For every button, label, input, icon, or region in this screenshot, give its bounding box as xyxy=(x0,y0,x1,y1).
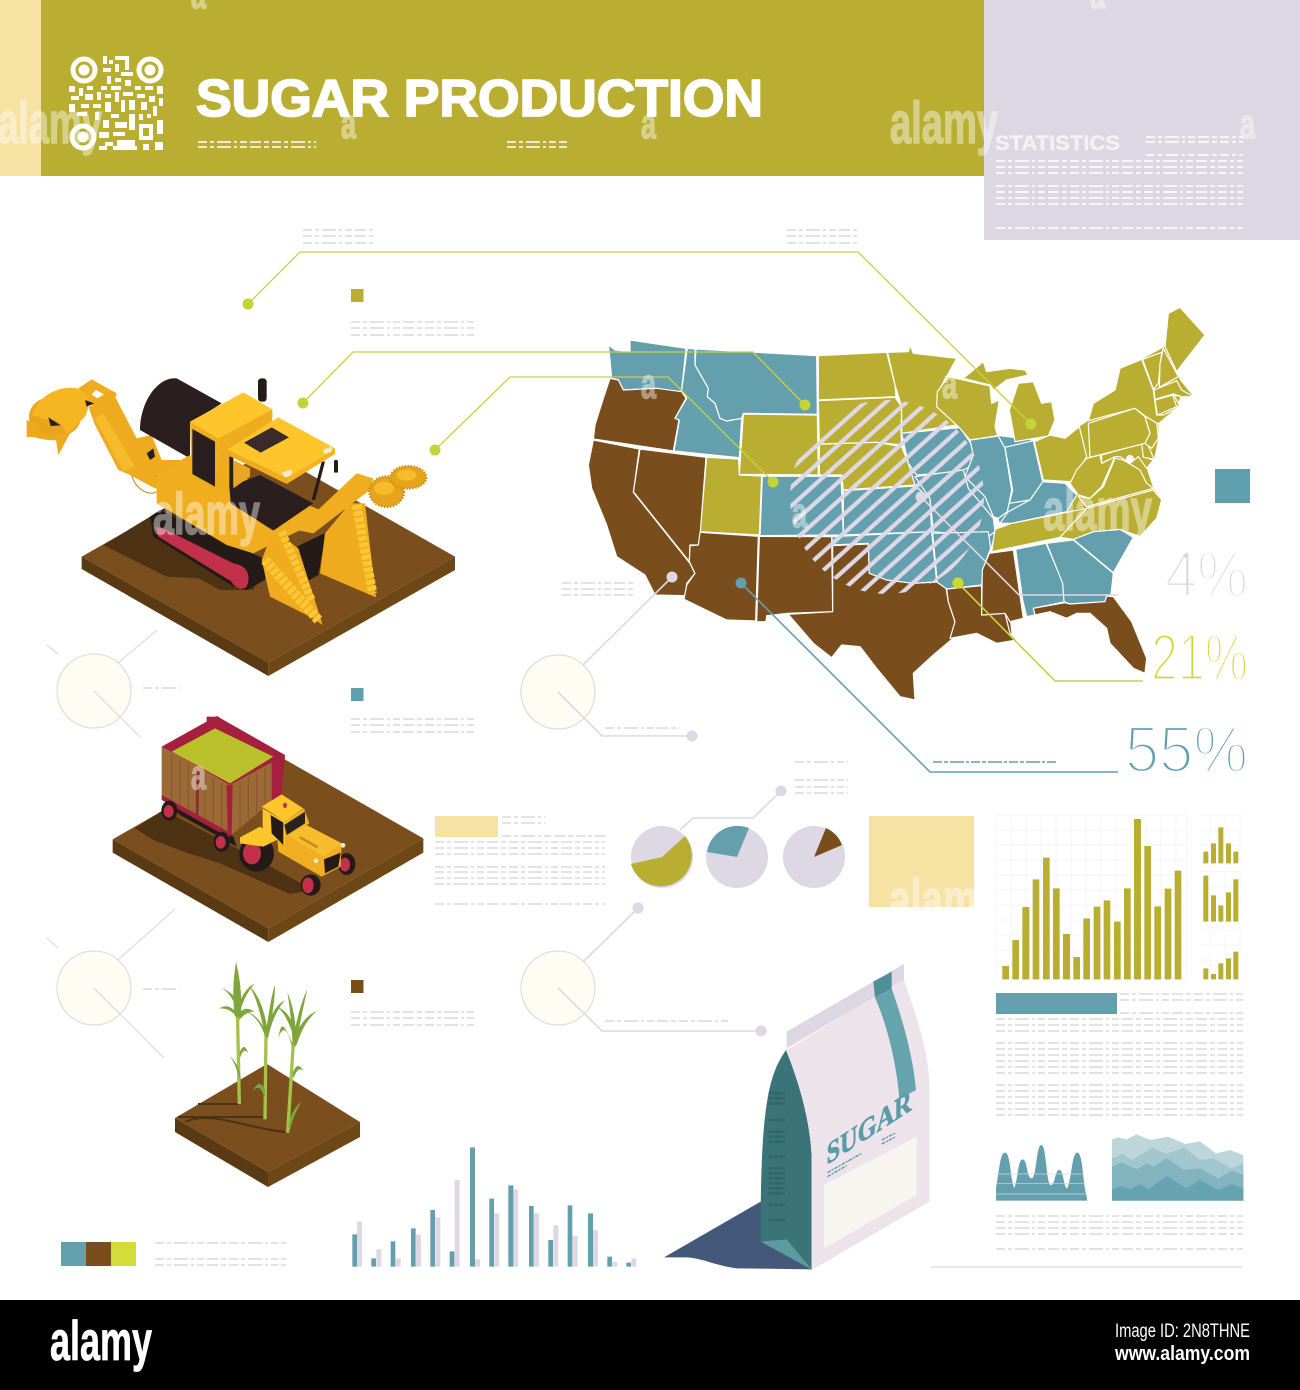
sugar bag xyxy=(664,964,929,1270)
watermarks: a xyxy=(641,100,656,147)
crop dividers xyxy=(262,503,376,625)
connector: 21% xyxy=(952,578,1143,681)
sugar cane circle callout xyxy=(47,909,180,1058)
pie: brown xyxy=(783,826,845,888)
connector: 55% xyxy=(736,578,1118,772)
black tank xyxy=(140,378,222,458)
map backing fills xyxy=(947,307,1205,642)
machine body xyxy=(157,455,322,553)
front arm with discs xyxy=(297,466,426,533)
pie charts xyxy=(631,762,848,888)
icon: map dot near California with circle callout xyxy=(521,572,698,742)
right column text block xyxy=(996,993,1243,1115)
western and central states xyxy=(588,340,1017,700)
percent: 4: 4% xyxy=(1165,537,1248,611)
map of the United States xyxy=(588,307,1205,700)
small olive bar charts xyxy=(1200,815,1242,982)
bag circle callout xyxy=(521,902,766,1036)
black throat xyxy=(297,533,326,582)
panel: statistics xyxy=(984,0,1300,240)
small bars: top xyxy=(1203,827,1238,863)
footer logo: alamy xyxy=(50,1309,152,1372)
hatched sugar beet region xyxy=(790,400,984,594)
statistics text lines xyxy=(996,137,1243,228)
bag side gusset xyxy=(761,1050,812,1270)
soil plot xyxy=(113,750,423,942)
title caption lines xyxy=(198,142,567,147)
watermarks: a xyxy=(641,360,656,407)
harvester on soil plot xyxy=(27,378,455,676)
exhaust xyxy=(258,378,267,402)
watermarks: a xyxy=(1240,100,1255,147)
eastern states xyxy=(937,307,1205,673)
track xyxy=(150,510,267,590)
marker: teal square with text xyxy=(351,688,475,732)
marker: large teal legend square xyxy=(1215,469,1250,503)
marker: olive square with text xyxy=(351,289,475,335)
watermarks: alamy xyxy=(0,91,102,156)
teal and lavender bar chart xyxy=(352,1147,636,1267)
percent callouts xyxy=(736,492,1248,786)
watermarks: alamy xyxy=(153,482,260,547)
small bars: middle xyxy=(1203,876,1238,922)
pie connector xyxy=(680,762,848,830)
watermarks: alamy xyxy=(890,91,998,156)
bag window xyxy=(824,1137,917,1248)
text block beside tractor xyxy=(435,816,605,904)
bag top seal xyxy=(787,964,904,1048)
pie: olive xyxy=(631,826,693,888)
watermarks: a xyxy=(191,751,206,798)
top labels xyxy=(303,230,857,243)
pie: teal xyxy=(706,826,768,888)
engine box xyxy=(190,392,272,490)
watermarks: a xyxy=(341,100,356,147)
claw head xyxy=(27,379,117,455)
watermarks: alamy xyxy=(1043,478,1152,543)
tractor and trailer on soil plot xyxy=(113,716,423,942)
trailer xyxy=(161,716,285,852)
bag front xyxy=(787,978,929,1270)
soil plot xyxy=(175,1064,360,1187)
bag shadow xyxy=(664,1202,812,1269)
connector: top yellow-green lines with dots xyxy=(242,252,1036,488)
sugar cane plot xyxy=(175,962,360,1187)
connector: 4% xyxy=(916,492,1119,595)
watermarks xyxy=(0,0,1255,798)
sugar cane plants xyxy=(217,962,317,1133)
watermarks: a xyxy=(942,360,957,407)
panel: yellow square xyxy=(869,816,974,907)
footer bar xyxy=(0,1300,1300,1390)
percent: 55: 55% xyxy=(1125,712,1248,786)
dot: capital marker xyxy=(1126,455,1134,463)
tractor xyxy=(239,794,355,896)
icon: QR code xyxy=(69,56,163,150)
main olive bar chart xyxy=(996,815,1187,980)
statistics heading: STATISTICS xyxy=(995,132,1120,155)
rear arm xyxy=(88,397,180,493)
cab xyxy=(227,417,338,531)
bag teal strip xyxy=(873,972,916,1099)
harvester circle callout xyxy=(47,630,180,737)
panel: yellow square: alamy xyxy=(889,868,999,933)
bag label: SUGAR xyxy=(827,1083,912,1172)
percent: 21: 21% xyxy=(1151,620,1248,694)
area chart: peaks xyxy=(996,1145,1087,1201)
bottom right text lines xyxy=(931,1216,1243,1267)
footer url: www.alamy.com xyxy=(1114,1343,1250,1365)
marker: brown square with text xyxy=(351,980,475,1025)
header band xyxy=(0,0,984,176)
small bars: bottom xyxy=(1203,952,1238,979)
watermarks: a xyxy=(792,489,807,536)
colour legend xyxy=(61,1242,286,1266)
title: SUGAR PRODUCTION xyxy=(196,70,763,128)
soil plot xyxy=(82,451,455,676)
area chart: stacked layers xyxy=(1112,1134,1243,1201)
footer image id: Image ID: 2N8THNE xyxy=(1115,1321,1250,1342)
